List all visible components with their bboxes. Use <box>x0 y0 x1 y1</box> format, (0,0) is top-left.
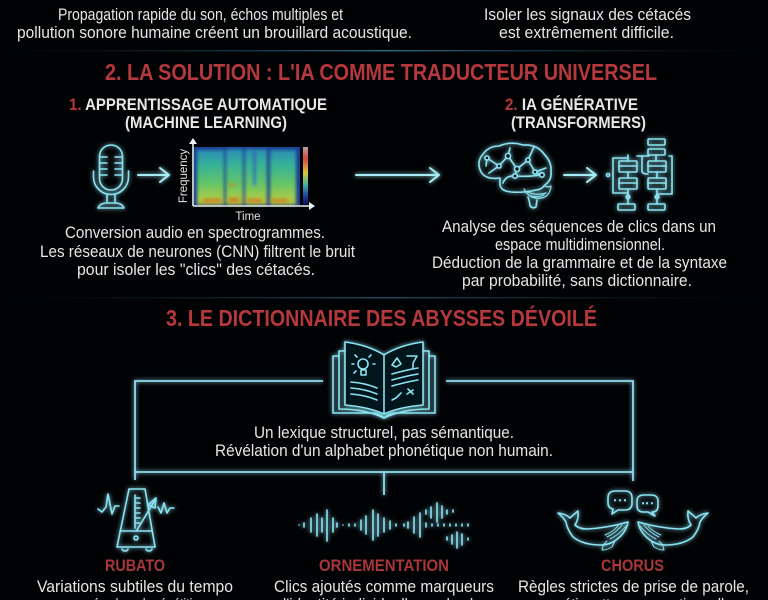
text block: acoustic fog: pollution sonore humaine créent un brouillard acoustique. <box>17 24 412 42</box>
label: chorus: CHORUS <box>601 556 664 575</box>
text: chorus description: Règles strictes de prise de parole, <box>518 578 749 596</box>
text block: generative AI description <box>432 218 727 290</box>
chart: spectrogram <box>178 138 315 223</box>
text block: structural lexicon <box>215 424 553 460</box>
text: rubato description: Variations subtiles du tempo <box>37 578 233 596</box>
text block: machine learning description: Conversion audio en spectrogrammes. <box>65 224 325 242</box>
subheading: generative AI <box>505 95 646 132</box>
icon: transformer diagram <box>606 139 672 210</box>
text block: isolating signals: est extrêmement difficile. <box>499 24 674 42</box>
text block: structural lexicon: Un lexique structurel, pas sémantique. <box>254 424 514 442</box>
text: ornementation description: Clics ajoutés comme marqueurs <box>274 578 494 596</box>
icon: brain <box>479 143 551 208</box>
subheading: generative AI: 2. IA GÉNÉRATIVE <box>505 95 638 114</box>
icon: open book <box>333 342 435 418</box>
label: rubato: RUBATO <box>105 556 165 575</box>
column: rubato <box>37 489 233 600</box>
chart: spectrogram: Time <box>235 211 261 223</box>
arrow: spectrogram to brain <box>356 168 439 182</box>
panel: problem text (cropped top) <box>17 6 691 42</box>
heading: section 3: 3. LE DICTIONNAIRE DES ABYSSES DÉVOILÉ <box>166 304 597 331</box>
panel: dictionary <box>37 304 749 600</box>
panel: solution <box>40 59 727 290</box>
subheading: machine learning: (MACHINE LEARNING) <box>125 113 287 132</box>
chart: spectrogram: Frequency <box>178 149 190 203</box>
arrow: mic to spectrogram <box>138 168 169 182</box>
text block: generative AI description: Analyse des séquences de clics dans un <box>442 218 716 236</box>
text block: generative AI description: par probabilité, sans dictionnaire. <box>462 272 692 290</box>
subheading: generative AI: (TRANSFORMERS) <box>511 113 646 132</box>
text block: machine learning description: pour isoler les "clics" des cétacés. <box>77 261 315 279</box>
column: chorus <box>518 491 749 600</box>
text block: acoustic fog: Propagation rapide du son, échos multiples et <box>58 6 343 24</box>
column: ornementation <box>274 503 494 600</box>
text block: acoustic fog <box>17 6 412 42</box>
icon: waveform <box>299 503 468 548</box>
connector: bracket lines <box>135 381 633 495</box>
subheading: machine learning: 1. APPRENTISSAGE AUTOMATIQUE <box>69 95 327 114</box>
text block: generative AI description: espace multidimensionnel. <box>495 236 665 254</box>
text block: isolating signals: Isoler les signaux des cétacés <box>484 6 691 24</box>
icon: two whales with speech bubbles <box>558 491 708 550</box>
label: ornementation: ORNEMENTATION <box>319 556 449 575</box>
icon: microphone <box>94 145 128 208</box>
text block: isolating signals <box>484 6 691 42</box>
heading: section 2: 2. LA SOLUTION : L'IA COMME TRADUCTEUR UNIVERSEL <box>105 59 657 85</box>
text block: generative AI description: Déduction de la grammaire et de la syntaxe <box>432 254 727 272</box>
text block: structural lexicon: Révélation d'un alphabet phonétique non humain. <box>215 442 553 460</box>
text block: machine learning description: Les réseaux de neurones (CNN) filtrent le bruit <box>40 243 355 261</box>
icon: metronome <box>98 489 174 551</box>
subheading: machine learning <box>69 95 327 132</box>
text block: machine learning description <box>40 224 355 279</box>
arrow: brain to transformer <box>564 168 596 182</box>
